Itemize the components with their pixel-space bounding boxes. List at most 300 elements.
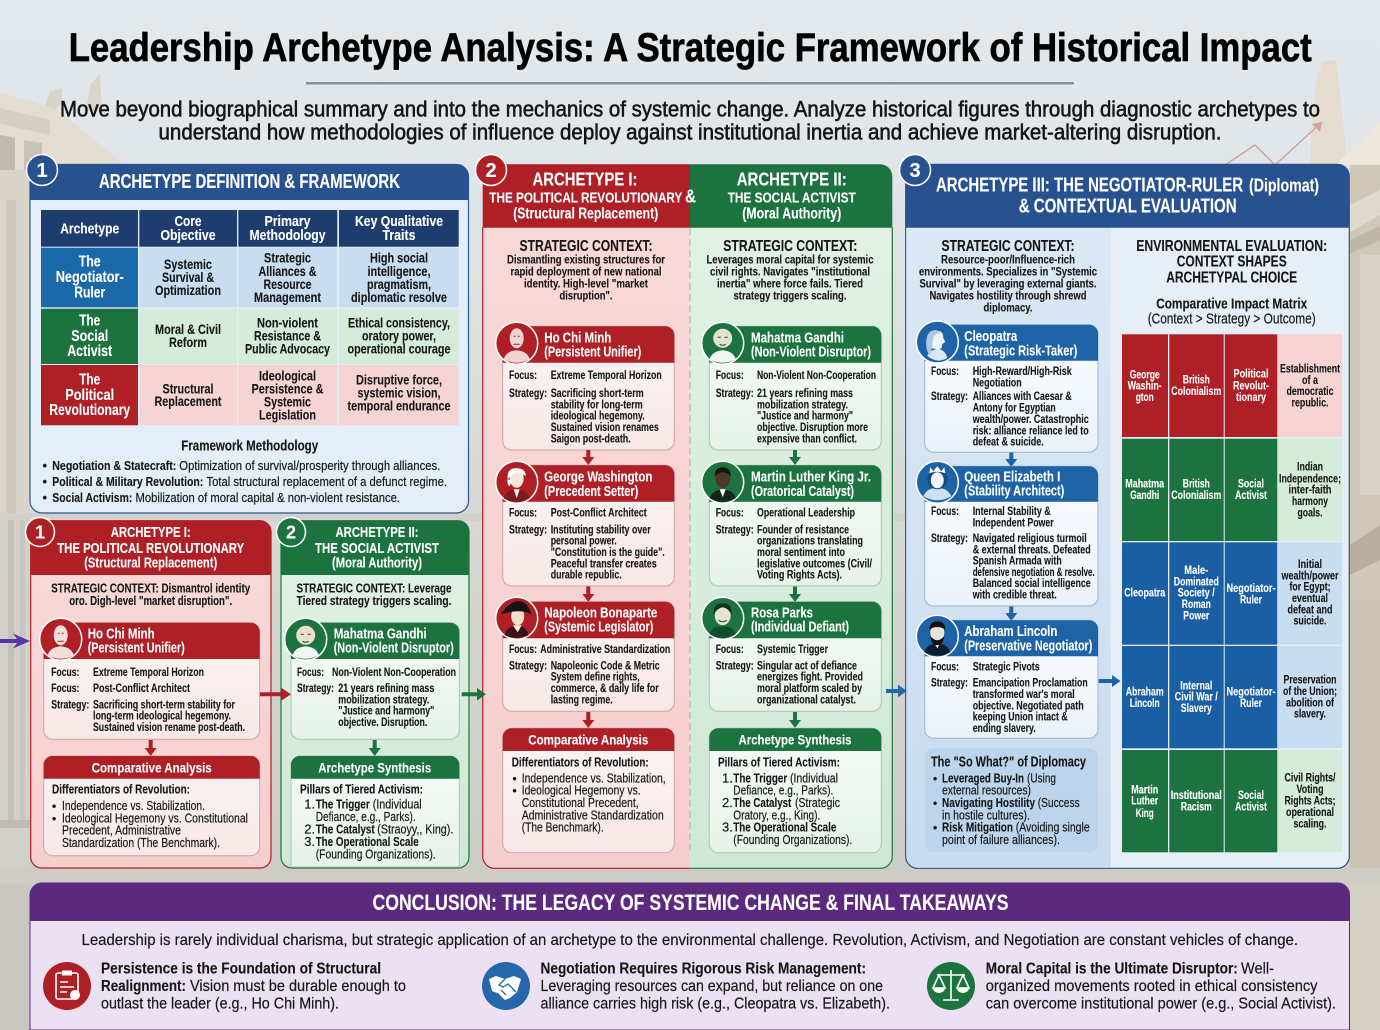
card: archetype synthesis detail: The Trigger — [733, 770, 787, 785]
text block: negotiation takeaway — [540, 960, 890, 1012]
card: Rosa Parks — [702, 597, 881, 711]
matrix row: Cleopatra: Society / — [1178, 586, 1215, 600]
matrix row: Mahatma Gandhi: Activist — [1235, 488, 1267, 502]
card: archetype synthesis: Pillars of Tiered Activism: — [300, 782, 423, 797]
text block: strategic context right: civil rights. Navigates "institutional — [710, 265, 870, 279]
arrow: down — [582, 450, 594, 465]
badge: number 2: 2 — [286, 522, 296, 542]
subtitle text: Move beyond biographical summary and into the mechanics of systemic change. Analyze historical figures through diagnostic archetypes to — [60, 97, 1320, 122]
heading: archetype III — [936, 175, 1319, 217]
text: name — [88, 625, 185, 657]
arrow: down to synthesis — [369, 740, 381, 756]
table: archetype comparison: Ideological — [259, 367, 316, 383]
matrix row: Mahatma Gandhi: Colonialism — [1171, 488, 1221, 502]
text: focus and strategy: risk: alliance reliance led to — [973, 423, 1089, 437]
card: comparative analysis detail: • — [512, 771, 517, 785]
text block: persistence takeaway: outlast the leader (e.g., Ho Chi Minh). — [101, 995, 339, 1012]
matrix row: Mahatma Gandhi: goals. — [1298, 505, 1322, 519]
callout: the so what of diplomacy: in hostile cultures). — [942, 807, 1030, 822]
matrix row: Mahatma Gandhi: Gandhi — [1130, 488, 1159, 502]
text block: framework methodology — [42, 438, 447, 505]
text: focus and strategy: ideological hegemony. — [551, 409, 645, 423]
table: archetype comparison: Management — [254, 289, 321, 305]
table: archetype comparison: Activist — [67, 343, 113, 360]
table: archetype comparison: Optimization — [155, 282, 221, 298]
matrix row: Cleopatra — [1122, 542, 1342, 645]
text: focus and strategy: 21 years refining mass — [757, 386, 853, 400]
text block: strategic context: diplomacy. — [984, 301, 1032, 315]
text: name: (Preservative Negotiator) — [964, 637, 1092, 654]
heading: environmental evaluation: ENVIRONMENTAL EVALUATION: — [1136, 238, 1327, 255]
text: focus and strategy: Alliances with Caesar & — [973, 389, 1072, 403]
callout: the so what of diplomacy: point of failure alliances). — [942, 832, 1060, 847]
text block: strategic context left: STRATEGIC CONTEXT: — [520, 238, 652, 255]
text block: strategic context: environments. Specializes in "Systemic — [919, 265, 1097, 279]
table: archetype comparison: Legislation — [259, 406, 316, 422]
heading: archetype definition: ARCHETYPE DEFINITION & FRAMEWORK — [99, 171, 400, 193]
matrix row: Cleopatra: Ruler — [1240, 592, 1262, 606]
card: archetype synthesis detail: 1. — [722, 770, 733, 785]
table: archetype comparison: Negotiator- — [56, 269, 124, 286]
text: name — [751, 604, 849, 636]
matrix row: Cleopatra: Roman — [1182, 597, 1211, 611]
text: name: (Stability Architect) — [964, 483, 1064, 500]
card: comparative analysis detail: Independence vs. Stabilization, — [522, 770, 666, 785]
table: archetype comparison: Reform — [169, 334, 207, 350]
text: focus and strategy: 21 years refining mass — [338, 681, 435, 695]
card: archetype synthesis detail: 3. — [722, 820, 733, 835]
text: name: Mahatma Gandhi — [751, 329, 844, 346]
text block: strategic context right: STRATEGIC CONTEXT: — [723, 238, 857, 255]
heading: archetype I — [57, 524, 244, 572]
text: name: Mahatma Gandhi — [334, 625, 427, 642]
text: focus and strategy: Strategy: — [509, 658, 547, 672]
text block: framework methodology: Political & Military Revolution: — [52, 474, 203, 489]
text: focus and strategy: Strategy: — [931, 676, 968, 690]
text: name: Ho Chi Minh — [544, 329, 611, 346]
heading: environmental evaluation: (Context > Strategy > Outcome) — [1148, 310, 1316, 327]
matrix row: Mahatma Gandhi: Mahatma — [1125, 476, 1164, 490]
badge: number 2 — [476, 154, 506, 186]
text: focus and strategy: Negotiation — [973, 375, 1022, 389]
icon: handshake — [482, 962, 530, 1010]
matrix row: Abraham Lincoln: Lincoln — [1130, 696, 1160, 710]
text: focus and strategy: Focus: — [509, 368, 537, 382]
text: focus and strategy: moral platform scaled by — [757, 681, 862, 695]
callout: the so what of diplomacy — [925, 748, 1098, 852]
table: archetype comparison: Resource — [264, 276, 312, 292]
matrix row: Martin Luther King: Activist — [1235, 800, 1267, 814]
arrow: blue connector — [886, 685, 907, 697]
icon: Cleopatra portrait — [916, 321, 958, 363]
card: archetype synthesis detail: Archetype Synthesis — [738, 731, 852, 747]
text: focus and strategy: Focus: — [297, 665, 324, 679]
text: name: Abraham Lincoln — [964, 623, 1057, 640]
text: focus and strategy: objective. Disruption. — [338, 715, 427, 729]
text: focus and strategy: Strategy: — [931, 531, 968, 545]
arrow: down — [1005, 606, 1017, 621]
badge: number 2: 2 — [485, 160, 497, 182]
text: focus and strategy: legislative outcomes (Civil/ — [757, 556, 872, 570]
text: name: Martin Luther King Jr. — [751, 469, 871, 486]
card: comparative analysis: • — [52, 799, 56, 813]
matrix row: Mahatma Gandhi: British — [1183, 476, 1210, 490]
text: focus and strategy: defensive negotiation & resolve. — [973, 565, 1095, 579]
heading: archetype I column — [489, 170, 696, 222]
card: Mahatma Gandhi detail — [702, 322, 881, 450]
table: archetype comparison: Core — [174, 213, 202, 230]
arrow: red connector — [260, 688, 291, 700]
table: archetype comparison: Resistance & — [254, 327, 321, 343]
heading: archetype I column: THE POLITICAL REVOLUTIONARY — [489, 189, 682, 206]
table: archetype comparison: Archetype — [60, 220, 119, 237]
icon: Queen Elizabeth portrait — [916, 461, 958, 503]
text block: negotiation takeaway: Negotiation Requires Rigorous Risk Management: — [540, 960, 866, 977]
matrix row: Cleopatra: Dominated — [1174, 574, 1219, 588]
matrix row: Cleopatra: defeat and — [1288, 602, 1332, 616]
card: archetype synthesis detail: (Founding Organizations). — [733, 832, 852, 847]
panel: conclusion — [30, 883, 1350, 1030]
heading: environmental evaluation: CONTEXT SHAPES — [1177, 253, 1287, 270]
text: name: (Persistent Unifier) — [88, 640, 185, 657]
matrix row: Cleopatra: wealth/power — [1281, 568, 1339, 582]
matrix row: Mahatma Gandhi — [1122, 439, 1342, 541]
text: focus and strategy: Founder of resistance — [757, 522, 849, 536]
text block: persistence takeaway: Vision must be durable enough to — [190, 978, 406, 995]
matrix row: Abraham Lincoln — [1122, 646, 1342, 748]
icon: scales of justice — [927, 962, 975, 1010]
table: archetype comparison: Strategic — [264, 250, 311, 266]
text block: persistence takeaway: Persistence is the Foundation of Structural — [101, 960, 381, 977]
table: archetype comparison: Revolutionary — [49, 402, 130, 419]
text block: framework methodology: Optimization of survival/prosperity through alliances. — [179, 458, 440, 473]
text: focus and strategy: long-term ideological hegemony. — [93, 709, 231, 723]
text: focus and strategy: personal power. — [551, 534, 617, 548]
card: Napoleon Bonaparte — [496, 597, 674, 711]
icon: Washington portrait — [496, 461, 538, 503]
heading: archetype I: ARCHETYPE I: — [111, 524, 191, 541]
text block: persistence takeaway: Realignment: — [101, 978, 186, 995]
card: comparative analysis detail — [503, 728, 674, 853]
card: archetype synthesis detail: Defiance, e.g., Parks). — [733, 783, 833, 798]
matrix row: Mahatma Gandhi: inter-faith — [1288, 482, 1332, 496]
callout: the so what of diplomacy: Risk Mitigation — [942, 820, 1013, 835]
icon: clipboard — [43, 962, 91, 1010]
arrow: down — [582, 586, 594, 602]
card: George Washington — [496, 461, 674, 586]
text: name: (Strategic Risk-Taker) — [964, 342, 1077, 359]
text block: strategic context left — [507, 238, 665, 303]
text: focus and strategy: System define rights, — [551, 670, 640, 684]
arrow: purple entry arrow — [0, 634, 30, 648]
text: focus and strategy: stability for long-term — [551, 397, 643, 411]
callout: the so what of diplomacy: (Success — [1038, 795, 1080, 810]
matrix row: George Washington: Establishment — [1280, 361, 1340, 375]
arrow: green connector — [462, 688, 486, 700]
text block: strategic context — [919, 238, 1097, 315]
text: name: Napoleon Bonaparte — [544, 604, 657, 621]
table: archetype comparison: Systemic — [164, 256, 212, 272]
text: focus and strategy: organizations translating — [757, 534, 863, 548]
matrix row: Abraham Lincoln: Internal — [1180, 678, 1212, 692]
card: comparative analysis detail: Ideological Hegemony vs. — [522, 783, 641, 798]
text: focus and strategy: moral sentiment into — [757, 545, 845, 559]
heading: conclusion: CONCLUSION: THE LEGACY OF SYSTEMIC CHANGE & FINAL TAKEAWAYS — [372, 890, 1008, 915]
text: focus and strategy — [51, 665, 245, 734]
card: archetype synthesis detail: (Strategic — [795, 795, 840, 810]
text: name: Cleopatra — [964, 328, 1018, 345]
icon: Martin Luther King portrait — [702, 461, 744, 503]
text: focus and strategy: Internal Stability & — [973, 504, 1051, 518]
text: focus and strategy: Focus: — [931, 504, 959, 518]
text: focus and strategy: Singular act of defiance — [757, 658, 857, 672]
text: focus and strategy: Navigated religious turmoil — [973, 531, 1087, 545]
text: focus and strategy: Focus: — [51, 665, 79, 679]
card: comparative analysis detail: • — [512, 784, 517, 798]
card: archetype synthesis: 3. — [304, 834, 315, 849]
badge: number 1: 1 — [35, 522, 45, 542]
text block: strategic context: STRATEGIC CONTEXT: Dismantrol identity — [51, 580, 251, 595]
table: archetype comparison: Survival & — [162, 269, 214, 285]
matrix row: George Washington: democratic — [1286, 384, 1334, 398]
card: Cleopatra — [916, 321, 1098, 452]
text: focus and strategy — [716, 368, 876, 445]
matrix row: Abraham Lincoln: Civil War / — [1175, 690, 1218, 704]
table: archetype comparison: temporal endurance — [348, 397, 451, 413]
text: focus and strategy: Antony for Egyptian — [973, 401, 1056, 415]
table: archetype comparison: systemic vision, — [358, 384, 440, 400]
heading: archetype III: ARCHETYPE III: THE NEGOTIATOR-RULER — [936, 175, 1243, 197]
table: archetype comparison: intelligence, — [368, 263, 430, 279]
table: archetype comparison: Moral & Civil — [155, 321, 221, 337]
text: focus and strategy: Saigon post-death. — [551, 431, 631, 445]
text: focus and strategy: defeat & suicide. — [973, 435, 1044, 449]
heading: archetype II: THE SOCIAL ACTIVIST — [315, 540, 439, 557]
text block: framework methodology: • — [42, 458, 48, 473]
text: focus and strategy: Operational Leadership — [757, 506, 855, 520]
text block: moral capital takeaway: can overcome institutional power (e.g., Social Activist). — [986, 995, 1336, 1012]
card: comparative analysis: • — [52, 811, 56, 825]
text: focus and strategy: objective. Disruption more — [757, 420, 868, 434]
text: name — [964, 623, 1092, 654]
text: focus and strategy: Post-Conflict Architect — [551, 506, 647, 520]
text block: strategic context — [51, 580, 251, 608]
text block: conclusion summary: Leadership is rarely individual charisma, but strategic application of an archetype to the environmental challenge. Revolution, Activism, and Negotiation are constant vehicles of change. — [82, 932, 1298, 949]
text: focus and strategy: Focus: — [51, 681, 79, 695]
text block: strategic context left: identity. High-level "market — [524, 277, 648, 291]
text block: framework methodology: • — [42, 490, 48, 505]
matrix row: Abraham Lincoln: abolition of — [1286, 695, 1335, 709]
table: archetype comparison: oratory power, — [362, 327, 436, 343]
matrix row: Martin Luther King: Luther — [1131, 794, 1158, 808]
card: archetype synthesis detail: (Individual — [790, 770, 838, 785]
matrix row: Martin Luther King: scaling. — [1294, 816, 1326, 830]
callout: the so what of diplomacy: • — [933, 796, 937, 810]
text: focus and strategy: Focus: — [716, 642, 744, 656]
text: focus and strategy — [931, 659, 1088, 735]
matrix row: Martin Luther King: Institutional — [1171, 788, 1222, 802]
text block: strategic context — [296, 580, 452, 608]
text: name: (Non-Violent Disruptor) — [334, 640, 454, 657]
text: focus and strategy — [931, 364, 1089, 449]
badge: number 2 — [276, 518, 306, 546]
arrow: down to comparative analysis — [145, 740, 157, 756]
text: focus and strategy: Sustained vision rename post-death. — [93, 720, 245, 734]
panel: archetype III negotiator-ruler and contextual evaluation — [900, 154, 1349, 868]
text: focus and strategy: with credible threat. — [972, 587, 1057, 601]
matrix row: Cleopatra: Power — [1183, 608, 1210, 622]
heading: archetype II column — [728, 170, 856, 222]
subtitle text — [60, 97, 1320, 144]
heading: environmental evaluation: ARCHETYPAL CHOICE — [1166, 269, 1297, 286]
heading: archetype I column: & — [685, 186, 696, 206]
table: archetype comparison: Traits — [382, 227, 416, 244]
card: Ho Chi Minh — [40, 618, 260, 739]
arrow: down — [789, 712, 801, 728]
text: focus and strategy: Focus: — [509, 642, 537, 656]
card: comparative analysis detail: (The Benchmark). — [522, 820, 604, 835]
heading: archetype I column: (Structural Replacement) — [513, 205, 658, 222]
text block: strategic context: Resource-poor/Influence-rich — [941, 253, 1075, 267]
text: focus and strategy: Strategy: — [716, 386, 754, 400]
heading: archetype I column: ARCHETYPE I: — [532, 170, 638, 190]
arrow: to matrix — [1099, 675, 1120, 687]
matrix row: Abraham Lincoln: Abraham — [1126, 685, 1164, 699]
icon: Gandhi portrait — [285, 618, 327, 660]
text: name — [334, 625, 454, 657]
text: name: (Individual Defiant) — [751, 619, 849, 636]
matrix row: Cleopatra: for Egypt; — [1290, 580, 1330, 594]
text: focus and strategy: Focus: — [716, 506, 744, 520]
card: comparative analysis: Comparative Analysis — [92, 759, 212, 775]
card: archetype synthesis: 1. — [304, 797, 315, 812]
card: archetype synthesis detail: The Catalyst — [733, 795, 792, 810]
text block: strategic context left: rapid deployment of new national — [510, 265, 662, 279]
card: archetype synthesis detail: The Operational Scale — [733, 820, 836, 835]
table: archetype comparison: Primary — [264, 213, 311, 230]
card: Martin Luther King Jr. — [702, 461, 881, 586]
text block: framework methodology: Social Activism: — [52, 490, 132, 505]
text: focus and strategy: Focus: — [716, 368, 744, 382]
table: archetype comparison: pragmatism, — [367, 276, 431, 292]
text block: framework methodology: Total structural replacement of a defunct regime. — [206, 474, 447, 489]
text: focus and strategy: Strategy: — [716, 658, 754, 672]
matrix row: Mahatma Gandhi: Independence; — [1279, 471, 1341, 485]
callout: the so what of diplomacy: (Using — [1027, 770, 1056, 785]
table: archetype comparison: diplomatic resolve — [351, 289, 447, 305]
card: comparative analysis: Independence vs. Stabilization. — [62, 798, 205, 813]
heading: archetype III: & CONTEXTUAL EVALUATION — [1019, 195, 1237, 217]
matrix row: Abraham Lincoln: Negotiator- — [1226, 685, 1276, 699]
text: focus and strategy: durable republic. — [551, 568, 622, 582]
matrix row: Martin Luther King: Rights Acts; — [1284, 794, 1336, 808]
text: focus and strategy: High-Reward/High-Risk — [973, 364, 1072, 378]
text: focus and strategy: energizes fight. Provided — [757, 670, 863, 684]
card: Abraham Lincoln — [916, 615, 1098, 738]
matrix row: Mahatma Gandhi: Indian — [1297, 460, 1323, 474]
text: focus and strategy: Napoleonic Code & Metric — [551, 658, 660, 672]
matrix row: Martin Luther King: Social — [1238, 788, 1264, 802]
arrow: down — [1005, 452, 1017, 467]
card: Mahatma Gandhi — [285, 618, 459, 739]
heading: environmental evaluation: Comparative Impact Matrix — [1156, 295, 1308, 312]
card: archetype synthesis: The Trigger — [316, 797, 370, 812]
card: comparative analysis: Differentiators of Revolution: — [52, 782, 190, 797]
text block: negotiation takeaway: alliance carries high risk (e.g., Cleopatra vs. Elizabeth). — [540, 995, 890, 1012]
matrix row: Abraham Lincoln: Ruler — [1240, 696, 1262, 710]
text: name — [964, 469, 1064, 500]
text: name: Rosa Parks — [751, 604, 813, 621]
card: Ho Chi Minh detail — [496, 322, 674, 450]
text: focus and strategy — [716, 506, 872, 582]
matrix row: Cleopatra: eventual — [1292, 591, 1328, 605]
matrix row: Cleopatra: suicide. — [1294, 614, 1326, 628]
heading: archetype III: (Diplomat) — [1249, 176, 1319, 196]
heading: archetype I: (Structural Replacement) — [84, 555, 217, 572]
matrix row: Martin Luther King: Racism — [1181, 800, 1212, 814]
text: focus and strategy: mobilization strategy. — [338, 692, 429, 706]
matrix row: Abraham Lincoln: Slavery — [1181, 701, 1212, 715]
table: archetype comparison: Public Advocacy — [245, 340, 330, 356]
panel: archetype definition and framework — [26, 154, 468, 513]
text block: strategic context left: Dismantling existing structures for — [507, 253, 665, 267]
matrix row: George Washington: British — [1183, 372, 1210, 386]
matrix row: Cleopatra: Initial — [1298, 557, 1322, 571]
card: comparative analysis: Standardization (The Benchmark). — [62, 835, 220, 850]
text: focus and strategy: Systemic Trigger — [757, 642, 828, 656]
text: focus and strategy: Voting Rights Acts). — [757, 568, 842, 582]
arrow: down — [789, 450, 801, 465]
text: focus and strategy — [509, 368, 662, 445]
text: focus and strategy: Sacrificing short-term stability for — [93, 697, 235, 711]
panel: archetype I small summary — [26, 518, 271, 868]
text: name — [544, 329, 641, 361]
table: archetype comparison: Social — [71, 328, 108, 345]
text: focus and strategy: Peaceful transfer creates — [551, 556, 657, 570]
text: focus and strategy: objective. Negotiated path — [973, 698, 1084, 712]
matrix row: George Washington: gton — [1136, 390, 1154, 404]
text: name: (Oratorical Catalyst) — [751, 483, 854, 500]
text: focus and strategy: Strategy: — [51, 697, 89, 711]
text: name: (Non-Violent Disruptor) — [751, 344, 871, 361]
panel: archetype II small summary — [276, 518, 469, 868]
card: archetype synthesis: Archetype Synthesis — [318, 759, 431, 775]
table: archetype comparison: The — [79, 254, 101, 271]
card: archetype synthesis detail: Pillars of Tiered Activism: — [718, 754, 840, 769]
table: archetype comparison: Disruptive force, — [356, 371, 442, 387]
text: focus and strategy — [716, 642, 863, 706]
text: focus and strategy: Administrative Standardization — [540, 642, 670, 656]
card: comparative analysis detail: Comparative Analysis — [528, 731, 648, 747]
text: focus and strategy — [931, 504, 1095, 601]
text: name — [964, 328, 1077, 359]
chart: comparative impact matrix — [1122, 334, 1342, 852]
text: focus and strategy: Extreme Temporal Horizon — [551, 368, 662, 382]
matrix row: George Washington: Washin- — [1128, 379, 1162, 393]
text: name — [544, 604, 657, 636]
text: focus and strategy: & external threats. Defeated — [973, 542, 1091, 556]
text block: strategic context right: strategy triggers scaling. — [734, 289, 846, 303]
text: name: (Systemic Legislator) — [544, 619, 653, 636]
text: focus and strategy: Strategy: — [716, 522, 754, 536]
text: name — [751, 469, 871, 500]
text: focus and strategy: Emancipation Proclamation — [973, 676, 1088, 690]
text: name: George Washington — [544, 469, 652, 486]
text: focus and strategy: Strategy: — [509, 386, 547, 400]
text: name: (Precedent Setter) — [544, 483, 638, 500]
text: focus and strategy: Focus: — [931, 364, 959, 378]
badge: number 3: 3 — [909, 160, 921, 182]
